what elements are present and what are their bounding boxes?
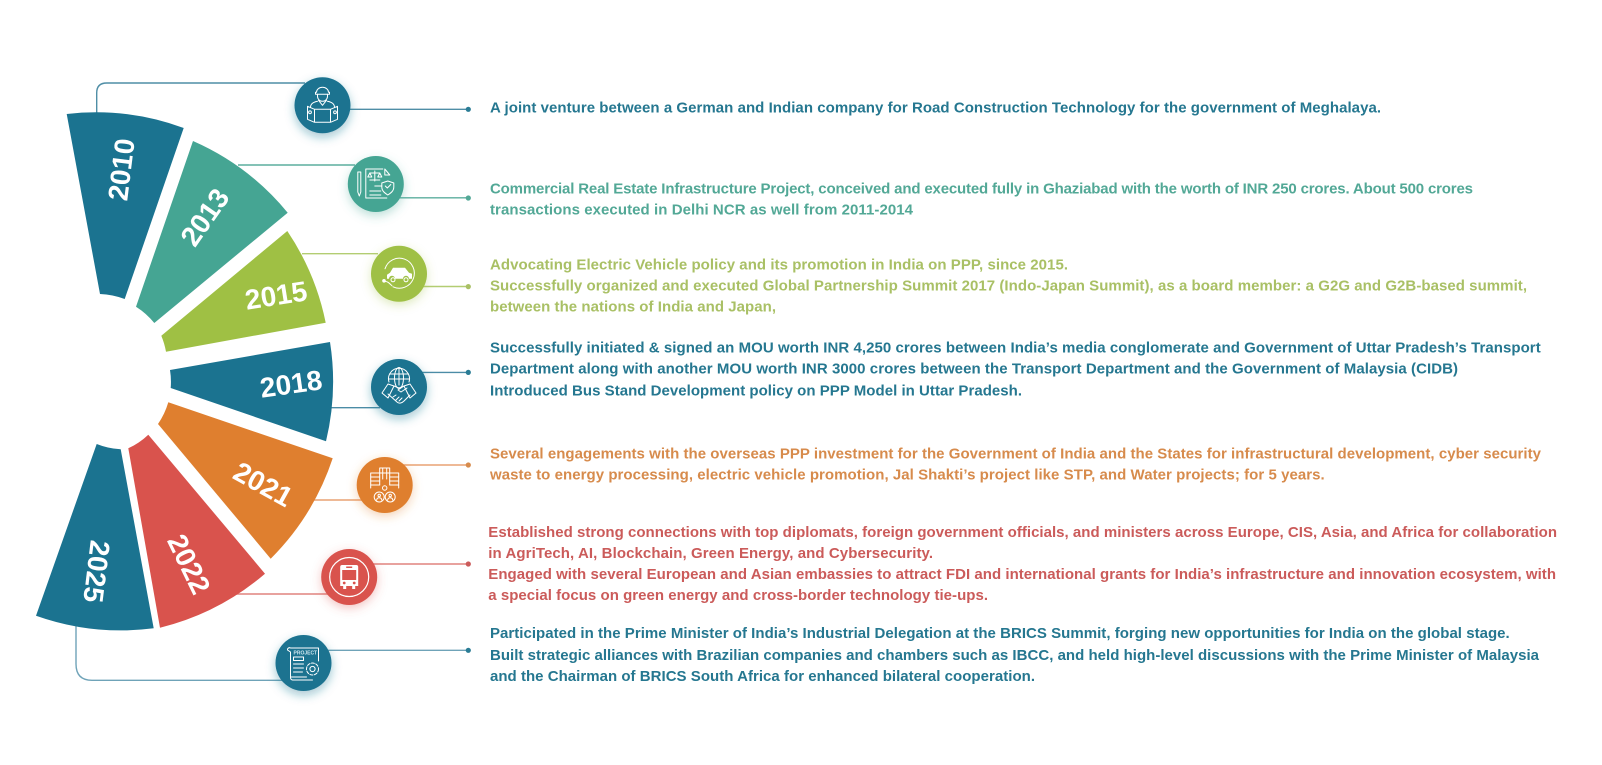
text: 2010 milestone: A joint venture between a German and Indian company for Road Construction Technology for the government of Meghalaya.	[490, 99, 1381, 116]
wedge: 2010	[67, 112, 184, 299]
text: 2021 milestone	[489, 445, 1542, 483]
text: 2018 milestone: Introduced Bus Stand Development policy on PPP Model in Uttar Pradesh.	[490, 382, 1022, 399]
text: 2013 milestone: transactions executed in Delhi NCR as well from 2011-2014	[490, 201, 914, 218]
icon: project scroll with gear	[276, 635, 332, 691]
wedge: 2018: 2018	[258, 364, 324, 404]
wedge: 2010: 2010	[102, 137, 141, 202]
text: 2025 milestone: and the Chairman of BRICS South Africa for enhanced bilateral cooperation.	[490, 668, 1035, 685]
icon: bus	[321, 549, 377, 605]
wedge: 2013: 2013	[174, 183, 235, 252]
wedge: 2021	[158, 402, 333, 559]
icon: globe and handshake	[371, 359, 427, 415]
icon: electric car	[371, 246, 427, 302]
connector: 2018	[330, 370, 471, 408]
text: 2018 milestone: Department along with another MOU worth INR 3000 crores between the Transport Department and the Government of Malaysia (CIDB)	[490, 360, 1458, 377]
text: 2022 milestone: Engaged with several European and Asian embassies to attract FDI and international grants for India’s infrastructure and innovation ecosystem, with	[488, 566, 1556, 583]
text: 2021 milestone: waste to energy processing, electric vehicle promotion, Jal Shakti’s project like STP, and Water projects; for 5 years.	[489, 466, 1325, 483]
icon: engineer with blueprint	[294, 77, 350, 133]
connector: 2010	[97, 83, 471, 114]
text: 2022 milestone	[488, 524, 1557, 604]
icon: buildings and people	[357, 457, 413, 513]
wedge: 2021: 2021	[228, 456, 298, 513]
text: 2022 milestone: a special focus on green energy and cross-border technology tie-ups.	[488, 587, 988, 604]
text: 2018 milestone	[490, 339, 1541, 399]
text: 2018 milestone: Successfully initiated & signed an MOU worth INR 4,250 crores between India’s media conglomerate and Government of Uttar Pradesh’s Transport	[490, 339, 1541, 356]
wedge: 2025	[36, 444, 154, 630]
text: 2015 milestone: between the nations of India and Japan,	[490, 298, 776, 315]
icon: project scroll with gear: PROJECT	[294, 650, 317, 656]
text: 2015 milestone: Advocating Electric Vehicle policy and its promotion in India on PPP, since 2015.	[490, 256, 1068, 273]
connector: 2015	[302, 254, 471, 289]
wedge: 2022: 2022	[161, 529, 216, 599]
text: 2021 milestone: Several engagements with the overseas PPP investment for the Government of India and the States for infrastructural development, cyber security	[490, 445, 1542, 462]
text: 2025 milestone	[490, 625, 1540, 685]
icon: legal document	[348, 156, 404, 212]
connector: 2022	[236, 561, 471, 594]
text: 2022 milestone: Established strong connections with top diplomats, foreign government officials, and ministers across Europe, CIS, Asia, and Africa for collaboration	[488, 524, 1557, 541]
text: 2025 milestone: Participated in the Prime Minister of India’s Industrial Delegation at the BRICS Summit, forging new opportunities for India on the global stage.	[490, 625, 1510, 642]
text: 2025 milestone: Built strategic alliances with Brazilian companies and chambers such as IBCC, and held high-level discussions with the Prime Minister of Malaysia	[490, 647, 1540, 664]
wedge: 2025: 2025	[77, 539, 116, 604]
text: 2013 milestone	[490, 180, 1473, 218]
wedge: 2018	[170, 342, 333, 441]
text: 2022 milestone: in AgriTech, AI, Blockchain, Green Energy, and Cybersecurity.	[488, 545, 933, 562]
connector: 2021	[314, 462, 471, 500]
text: 2015 milestone: Successfully organized and executed Global Partnership Summit 2017 (Indo-Japan Summit), as a board member: a G2G and G2B-based summit,	[490, 277, 1527, 294]
text: 2015 milestone	[490, 256, 1527, 315]
connector: 2013	[238, 165, 471, 201]
text: 2013 milestone: Commercial Real Estate Infrastructure Project, conceived and executed fully in Ghaziabad with the worth of INR 250 crores. About 500 crores	[490, 180, 1473, 197]
wedge: 2015: 2015	[243, 275, 309, 316]
wedge: 2022	[128, 435, 265, 628]
connector: 2025	[76, 625, 471, 680]
wedge: 2015	[161, 231, 326, 352]
wedge: 2013	[136, 141, 288, 323]
